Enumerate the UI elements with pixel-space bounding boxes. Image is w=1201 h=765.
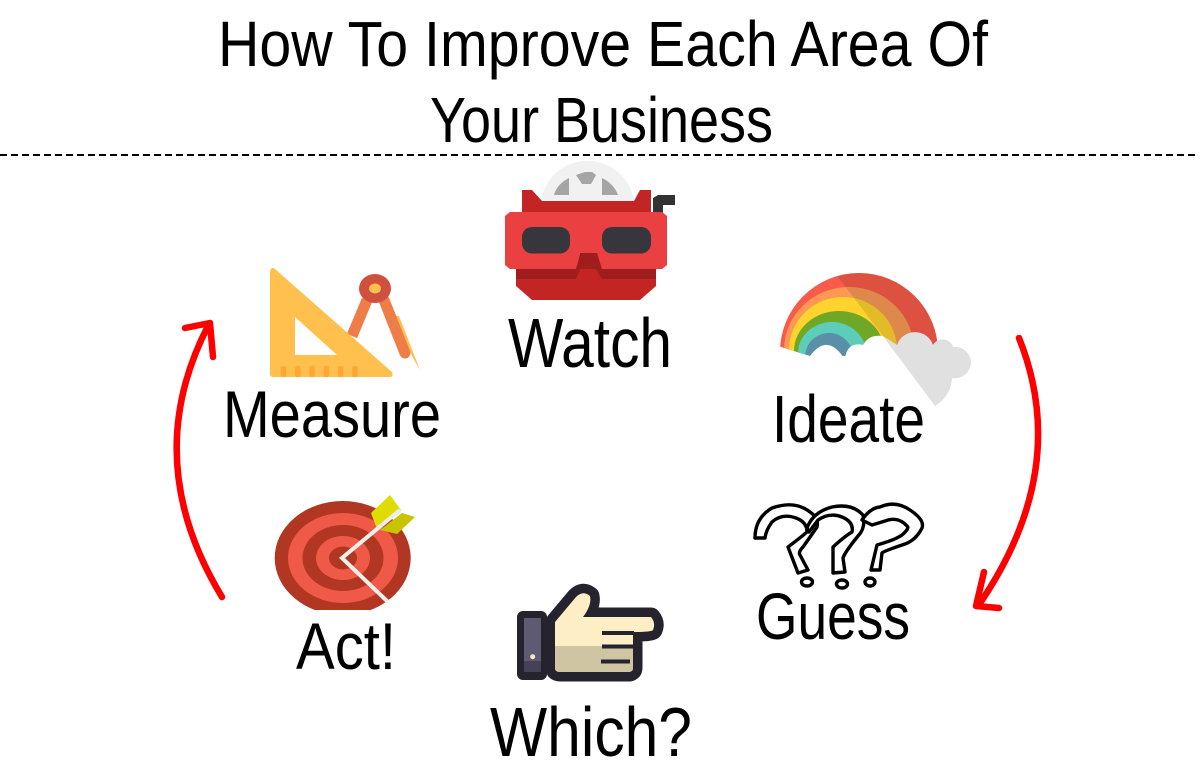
label: Watch: Watch (508, 304, 672, 382)
icon: pointing hand (517, 593, 654, 680)
icon: set square and compass (270, 268, 420, 377)
arrow: left clockwise (177, 323, 222, 597)
label: Measure: Measure (223, 377, 441, 451)
icon: rainbow and cloud (780, 273, 971, 406)
label: Act!: Act! (296, 609, 396, 683)
title: How To Improve Each Area Of (218, 8, 988, 80)
icon: question marks (755, 504, 922, 588)
arrow: right clockwise (976, 338, 1038, 608)
title: Your Business (430, 84, 773, 156)
icon: view-master (505, 161, 675, 300)
label: Guess: Guess (756, 579, 910, 653)
icon: target with arrow (275, 495, 415, 615)
title (218, 8, 988, 156)
label: Ideate: Ideate (772, 382, 925, 457)
